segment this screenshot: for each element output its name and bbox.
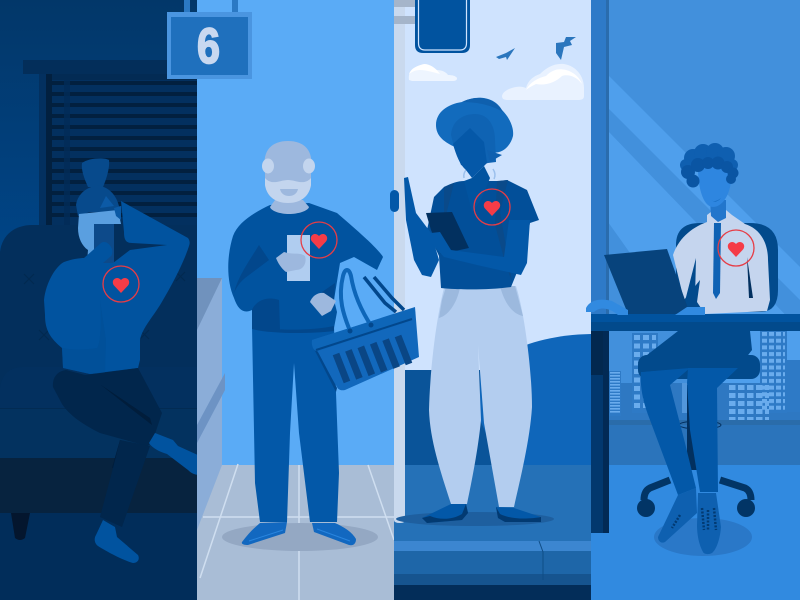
man with shopping list (228, 141, 383, 545)
panel: outdoors, woman with tablet (390, 0, 591, 600)
pillar (394, 0, 416, 523)
trousers (638, 331, 752, 495)
forearm (431, 220, 530, 275)
door handle (390, 190, 399, 212)
office desk (591, 314, 800, 533)
shadow (396, 512, 554, 526)
raised arm (404, 177, 439, 277)
heart badge (474, 189, 510, 225)
shoes (658, 488, 721, 554)
supermarket shelf (197, 278, 225, 530)
hands (586, 300, 705, 315)
city skyline (609, 331, 800, 465)
floor shadow (654, 518, 752, 556)
hanging sign number 6 (167, 0, 252, 79)
head and curly hair (680, 143, 738, 222)
hanging sign number 6: 6 (197, 18, 220, 74)
hands (276, 252, 336, 316)
shopping basket (312, 270, 419, 392)
trousers (429, 286, 532, 507)
top sign (415, 0, 470, 53)
birds (496, 37, 576, 60)
clouds (409, 64, 584, 100)
kerb steps (394, 541, 591, 600)
head and hat (436, 98, 513, 178)
head and beard (262, 141, 315, 214)
torso and straps (427, 166, 539, 289)
window column (591, 0, 609, 465)
sofa (0, 225, 197, 540)
office chair (637, 223, 778, 517)
heart badge (718, 230, 754, 266)
hill background (405, 334, 591, 465)
heart badge (301, 222, 337, 258)
shopping list paper (287, 235, 310, 281)
man at desk (638, 143, 770, 554)
panel: office, man at desk (586, 0, 800, 600)
floor shadow (222, 523, 378, 551)
panel: supermarket, man with basket (197, 0, 394, 600)
window blinds (23, 60, 197, 234)
floor tile lines (200, 464, 394, 600)
person on sofa (44, 158, 200, 563)
woman with tablet (396, 98, 554, 526)
shirt and arms (673, 205, 770, 314)
laptop (604, 249, 690, 314)
tablet (426, 212, 469, 254)
shoes (422, 504, 541, 523)
panel: bedroom, person on sofa (0, 0, 200, 600)
heart badge (103, 266, 139, 302)
light diagonal bands on window (608, 75, 800, 422)
